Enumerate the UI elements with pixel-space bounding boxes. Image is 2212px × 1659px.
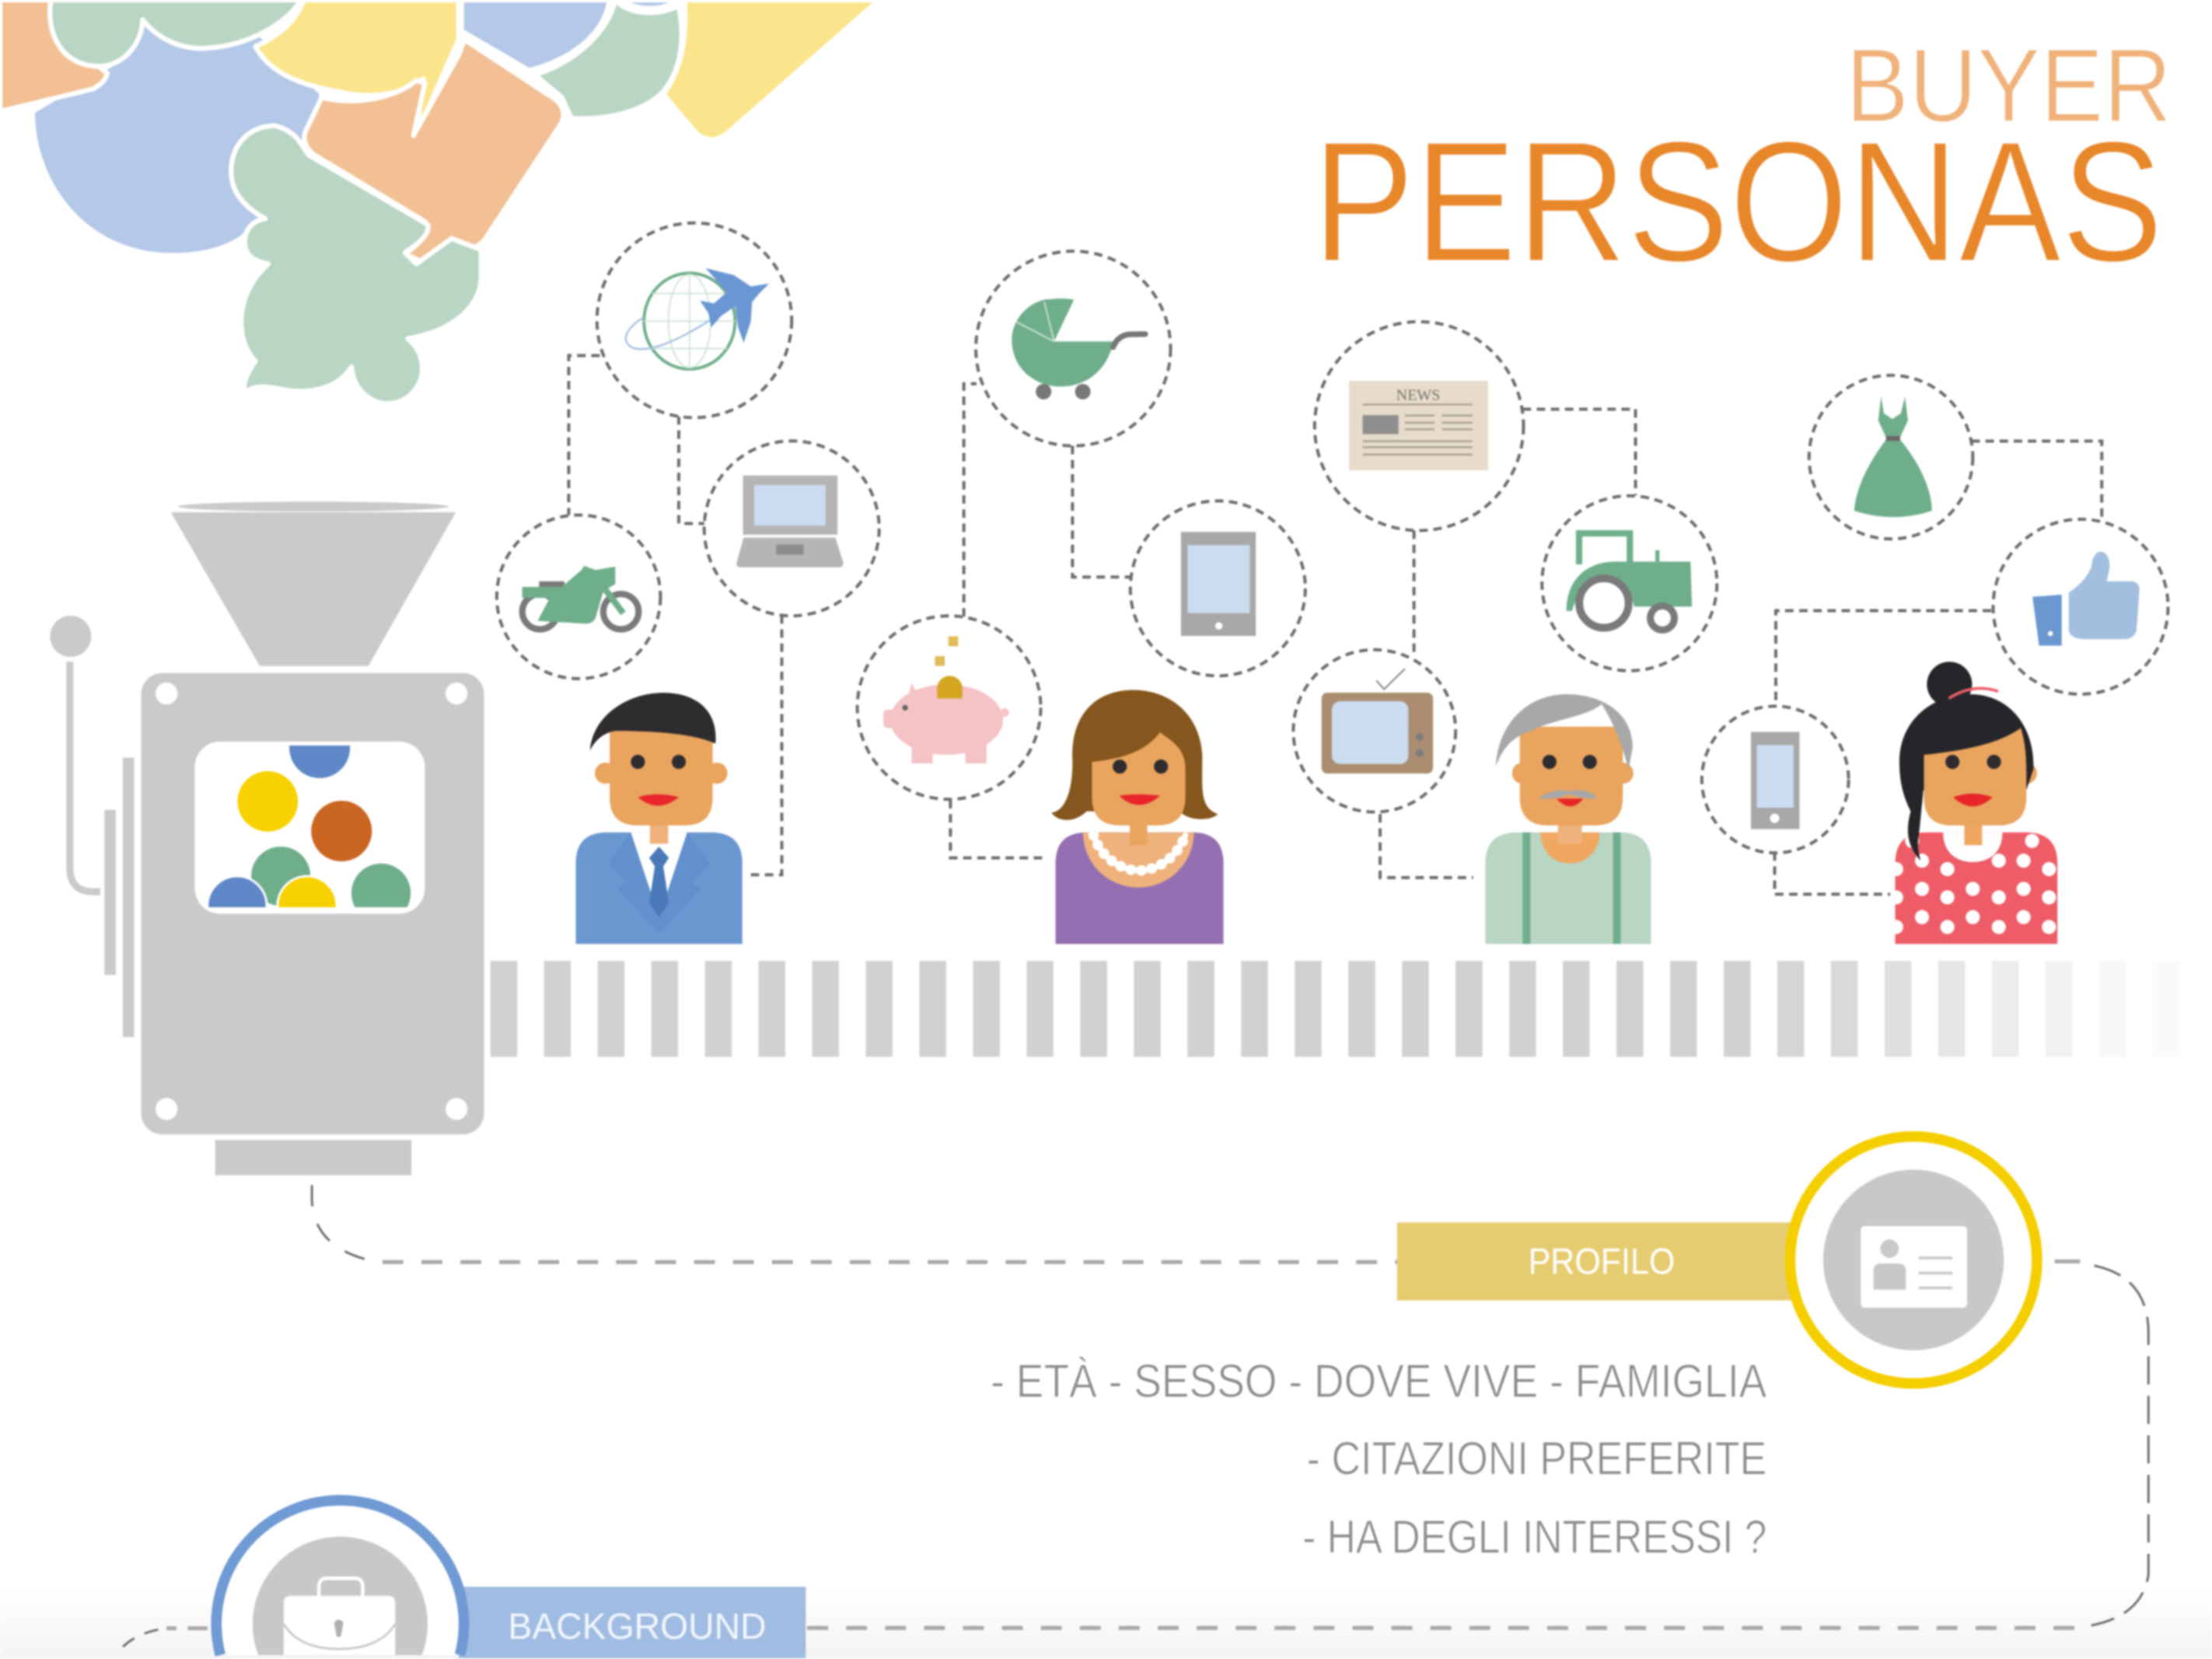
suspenders [1522,833,1530,944]
ears [1512,763,1533,784]
bubble: orange big [304,40,564,263]
icon circle: laptop [704,441,879,616]
bubble: green lower [231,126,481,403]
bubble: green right [535,0,682,119]
tie [649,847,669,917]
eyes [1945,755,1959,769]
icon circle: thumbs up [1993,519,2168,694]
icon circle: smartphone [1702,706,1849,853]
bubble: small blue top [622,0,676,9]
connector lines between icons [568,355,2102,894]
icon: briefcase badge [216,1500,464,1655]
ear [2016,763,2037,784]
icon circle: globe and plane [597,223,791,417]
machine window balls [207,745,412,909]
icon circle: newspaper: NEWS [1396,387,1440,404]
bubble: green top [50,0,301,66]
shirt [631,833,687,917]
icon circle: tractor [1542,496,1717,671]
face [1924,728,2026,826]
shirt [1485,833,1651,944]
hair [590,693,716,751]
moustache [1538,790,1598,799]
persona: man in suit [576,693,743,944]
section: PROFILO banner [1397,1222,1799,1301]
section: BACKGROUND banner [459,1587,805,1658]
icon circle: television [1293,650,1455,812]
polka dress [1896,833,2057,944]
ears [595,763,616,784]
bubble: yellow centre [256,0,459,135]
title [1312,27,2172,298]
neckline [1083,833,1193,888]
eyes [631,755,645,769]
suit [576,833,743,944]
icon circle: piggy bank [858,616,1041,799]
speech bubbles cluster [0,0,879,403]
conveyor belt stripes [491,961,2179,1057]
profile text list: - CITAZIONI PREFERITE [1307,1433,1766,1485]
face [610,722,713,826]
neck [650,819,668,843]
machine bolts [156,683,467,1120]
machine base [215,1140,411,1175]
profile text list: - ETÀ - SESSO - DOVE VIVE - FAMIGLIA [991,1355,1766,1407]
machine funnel [171,501,456,666]
bubble: orange top left [0,0,107,111]
profile text list: - HA DEGLI INTERESSI ? [1302,1511,1766,1563]
face [1520,727,1623,826]
neck [1130,816,1148,845]
bubble: yellow right [663,0,879,140]
icon circle: dress [1809,375,1973,539]
neck [1964,819,1982,845]
back hair [1899,694,2033,861]
hair bun [1927,662,1972,707]
globe [626,273,736,369]
title: BUYER: BUYER [1846,27,2172,144]
persona: woman in polka dots [1889,662,2057,944]
icon circle: baby pram [976,251,1171,446]
face [1092,732,1186,826]
icon circle: tablet [1130,501,1305,676]
icon circle: newspaper [1315,322,1523,530]
hair [1496,694,1633,769]
mouth [1119,795,1160,805]
persona: elderly man [1485,694,1651,944]
eyes [1113,760,1127,774]
neck [1558,819,1582,843]
persona: woman with pearl necklace [1051,690,1224,944]
headband [1948,688,1998,698]
section: PROFILO banner: PROFILO [1529,1241,1675,1282]
mouth [1557,798,1583,806]
plane [700,268,769,343]
dress [1056,833,1224,944]
necklace [1094,835,1186,871]
machine body [142,673,484,1134]
machine lever [50,616,134,1037]
profile text list [991,1355,1766,1563]
lapels [608,833,710,934]
collar [1943,833,2002,862]
machine [50,501,484,1175]
mouth [638,795,679,805]
icon: profile card badge [1790,1137,2037,1384]
machine window [195,742,425,913]
eyes [1543,755,1557,769]
bubble: large blue [33,21,322,256]
process dashed path [116,1186,2148,1655]
polka dots [1889,834,2056,934]
hair [1051,690,1218,820]
bubble: blue top [462,0,610,71]
neckline [1540,833,1600,864]
icon circle: motorcycle [497,515,660,679]
section: BACKGROUND banner: BACKGROUND [508,1605,767,1647]
mouth [1953,794,1993,806]
